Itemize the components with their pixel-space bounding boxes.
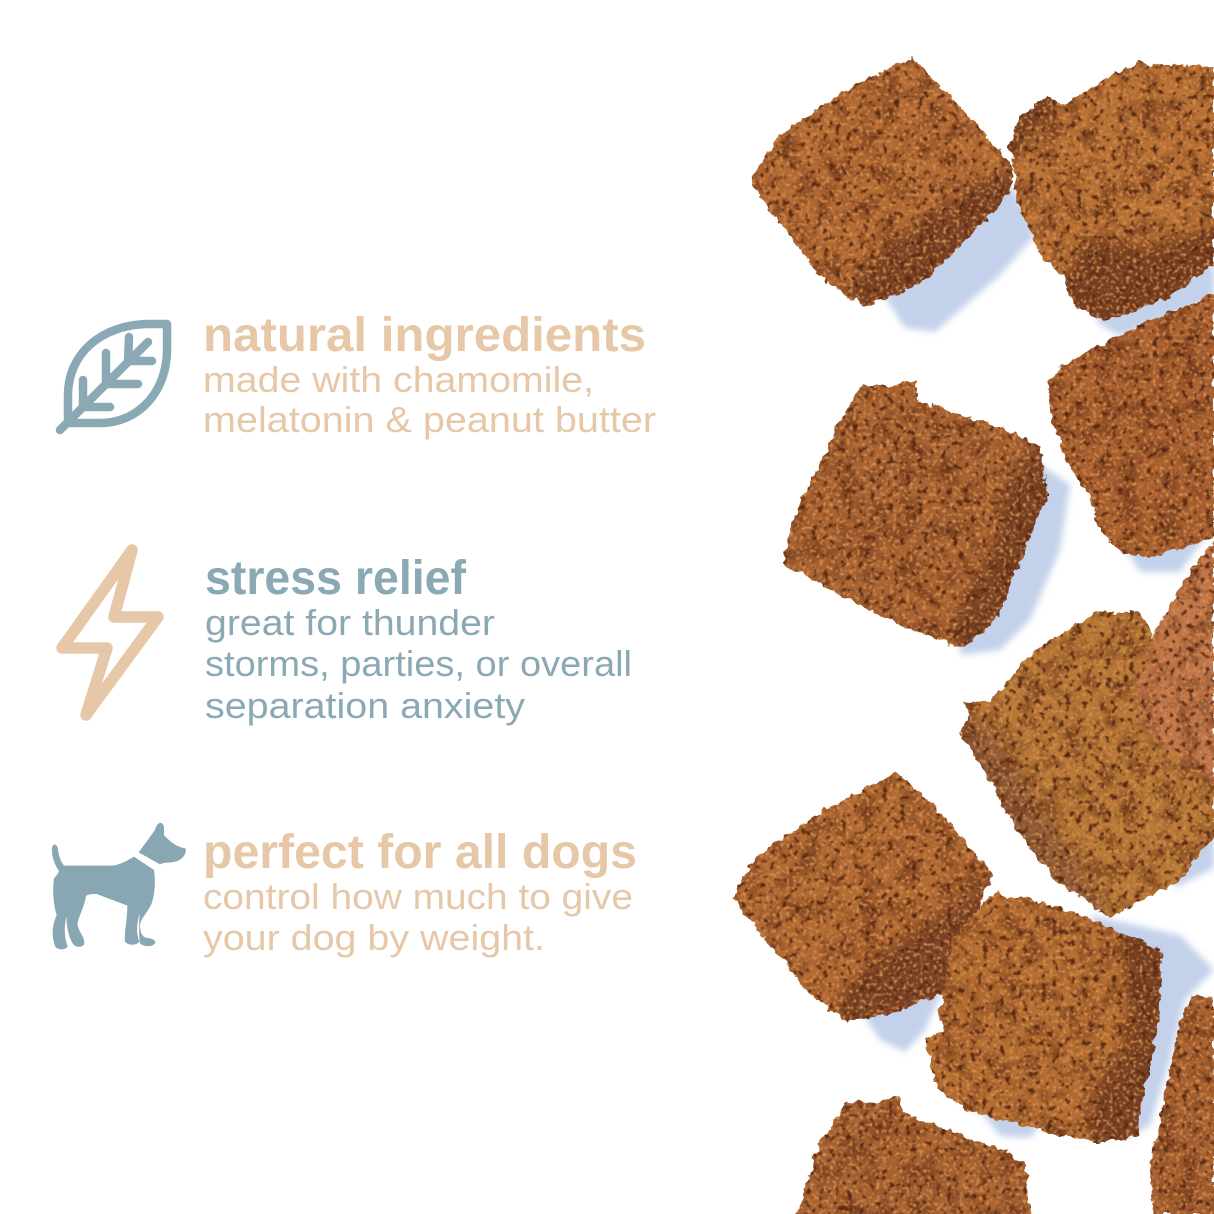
icon: leaf [60,324,167,430]
treat: centre left [783,380,1047,648]
treat: right upper [1047,294,1214,557]
treat: overlapping pink edge [1137,540,1214,785]
text: stress relief description [205,602,632,726]
treat: bottom right [1150,995,1214,1214]
treat: lower left [734,772,993,1022]
icon: lightning bolt [62,550,158,715]
text: natural ingredients description: melatonin & peanut butter [203,399,656,440]
text: natural ingredients description [203,359,656,440]
text: stress relief description: great for thunder [205,602,495,643]
treat: lower centre [925,890,1163,1143]
icon: dog [52,823,186,949]
text: stress relief description: storms, parties, or overall [205,643,632,684]
text: natural ingredients description: made with chamomile, [203,359,594,400]
text: perfect for all dogs description: your dog by weight. [203,917,545,958]
feature: stress relief [62,550,632,726]
feature: perfect for all dogs [52,823,637,958]
text: stress relief description: separation anxiety [205,685,525,726]
text: perfect for all dogs description: control how much to give [203,876,633,917]
heading: perfect for all dogs: perfect for all dogs [203,826,637,879]
treat: bottom [793,1095,1032,1214]
feature: natural ingredients [60,309,656,440]
treat shadows [860,180,1214,1140]
treat: centre right [960,612,1214,917]
heading: natural ingredients: natural ingredients [203,309,646,362]
treat: top left [750,57,1013,306]
text: perfect for all dogs description [203,876,633,958]
heading: stress relief: stress relief [205,552,467,605]
treat: top right [1007,63,1214,321]
